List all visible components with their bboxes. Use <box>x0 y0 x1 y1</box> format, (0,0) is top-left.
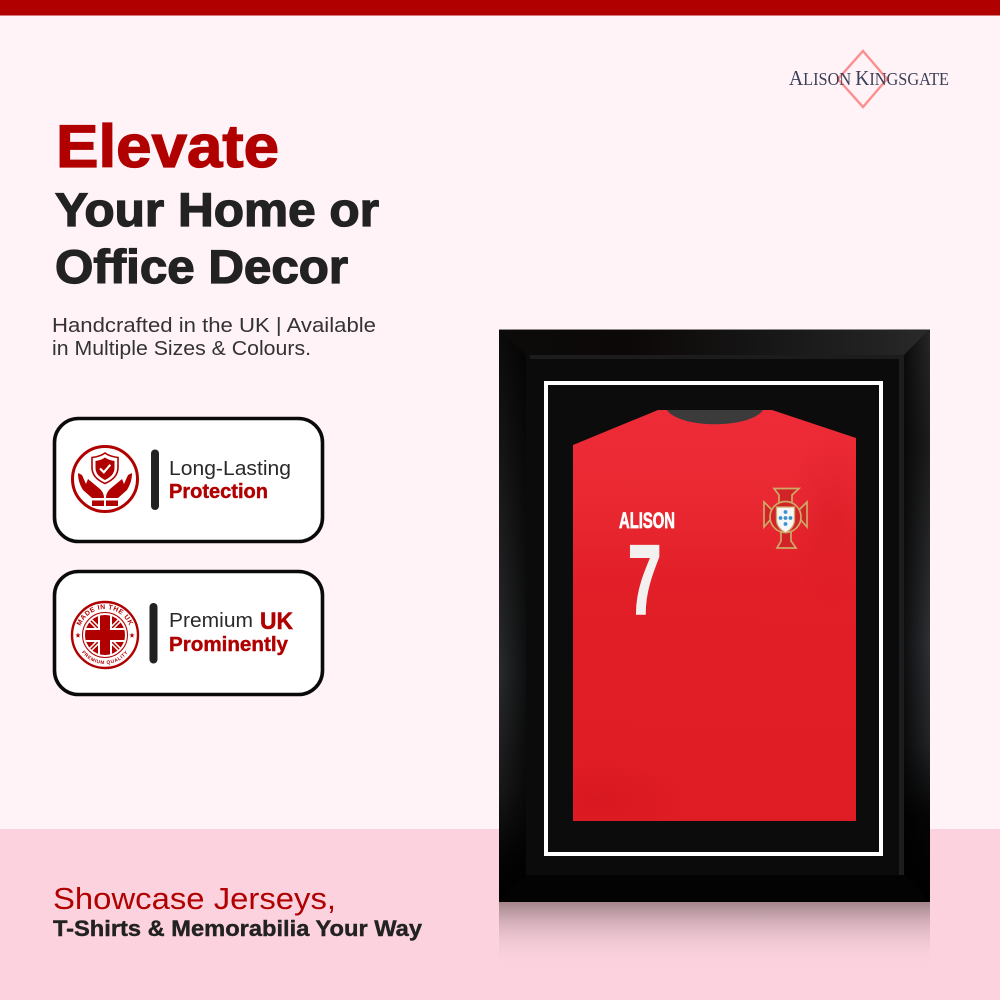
icon: made in the UK badge: MADE IN THE UK <box>76 604 134 626</box>
subtitle <box>52 315 376 360</box>
label: premium UK prominently: Premium <box>169 610 253 632</box>
frame <box>499 329 930 902</box>
logo: Alison Kingsgate: ALISON KINGSGATE <box>789 66 949 90</box>
bottom pink band <box>0 829 1000 1000</box>
top red bar <box>0 0 1000 16</box>
title: Elevate <box>56 113 279 180</box>
label: premium UK prominently <box>169 608 294 656</box>
icon: made in the UK badge: PREMIUM QUALITY <box>82 650 128 665</box>
title: Office Decor <box>55 240 348 293</box>
footer: showcase text <box>53 881 423 941</box>
white mat border <box>546 383 881 854</box>
subtitle: in Multiple Sizes & Colours. <box>52 338 311 360</box>
logo: Alison Kingsgate <box>789 51 949 107</box>
icon: shield held by hands <box>72 446 138 512</box>
panel: premium UK <box>52 570 324 696</box>
panel: long-lasting protection <box>54 418 322 542</box>
player name: ALISON <box>619 508 675 533</box>
subtitle: Handcrafted in the UK | Available <box>52 315 376 337</box>
label: long-lasting protection: Protection <box>169 481 268 503</box>
player number: 7 <box>628 525 661 635</box>
footer: showcase text: T-Shirts & Memorabilia Your Way <box>53 916 423 941</box>
label: premium UK prominently: Prominently <box>169 634 289 656</box>
jersey <box>573 410 856 821</box>
crest <box>764 488 807 548</box>
divider bar <box>150 603 158 664</box>
title <box>55 113 379 293</box>
icon: made in the UK badge <box>70 600 140 670</box>
label: long-lasting protection <box>169 458 291 503</box>
framed jersey <box>499 329 930 902</box>
label: long-lasting protection: Long-Lasting <box>169 458 291 480</box>
label: premium UK prominently: UK <box>260 608 294 635</box>
frame reflection <box>499 902 930 966</box>
title: Your Home or <box>55 183 379 236</box>
divider bar <box>151 450 159 510</box>
footer: showcase text: Showcase Jerseys, <box>53 881 336 916</box>
